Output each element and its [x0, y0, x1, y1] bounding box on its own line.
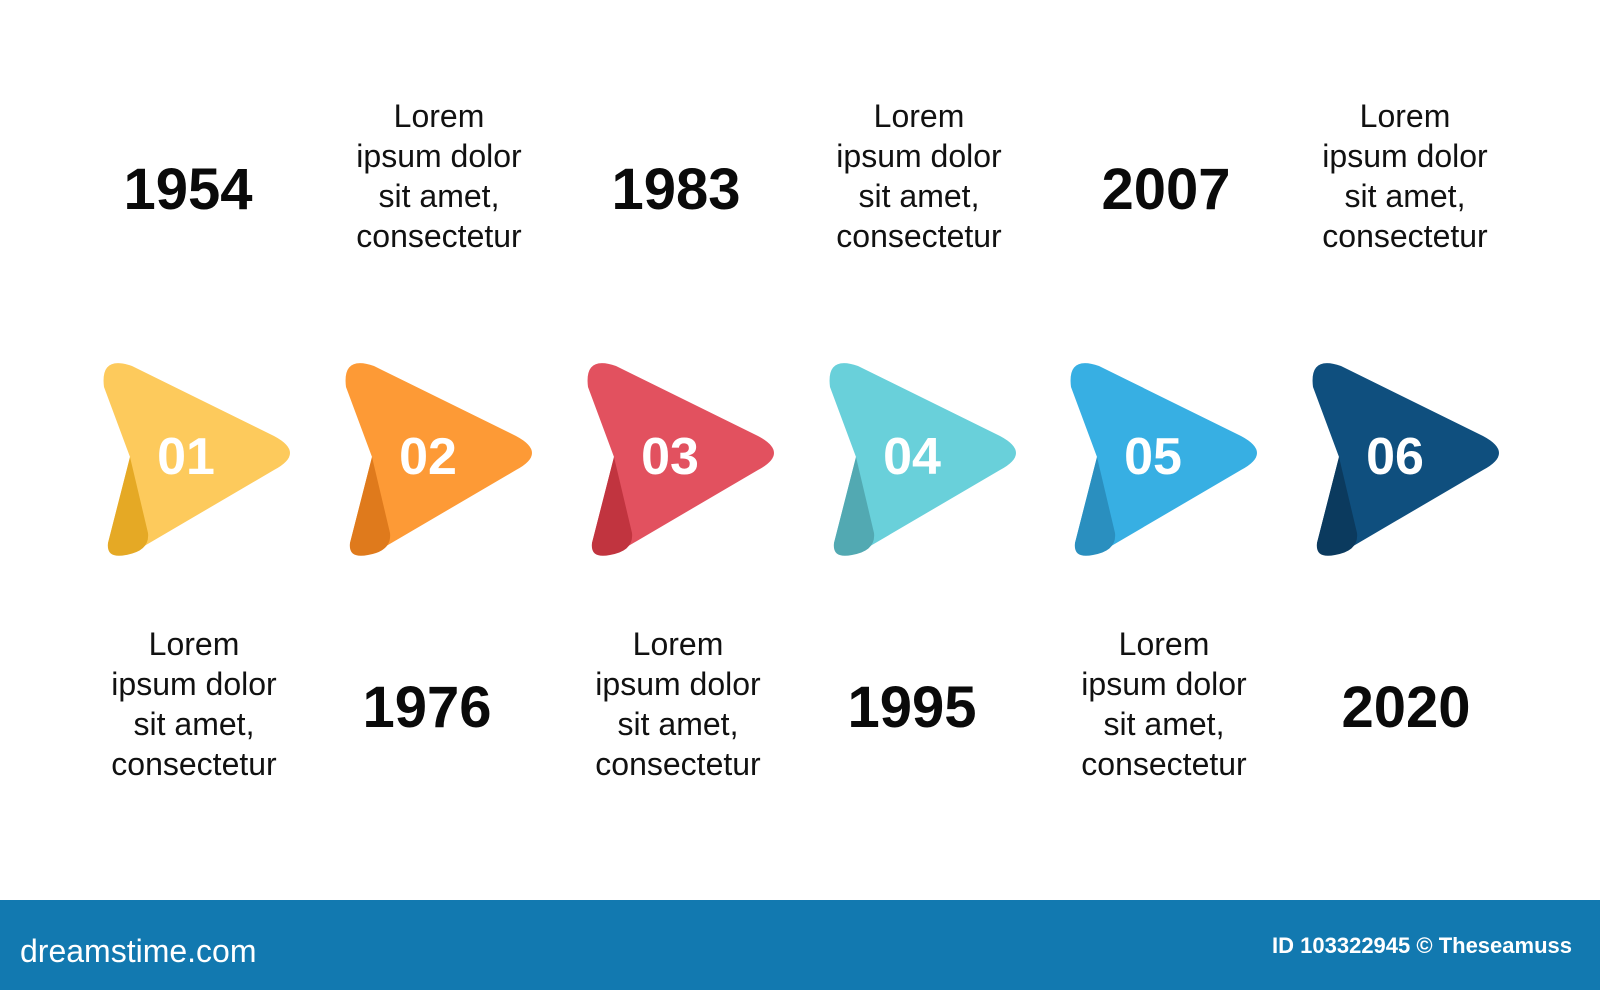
arrow 01 [104, 363, 290, 556]
top text block 1: sit amet, [379, 178, 499, 214]
bottom text block 1 [111, 626, 277, 782]
footer bar [0, 900, 1600, 990]
arrow 04 [830, 363, 1016, 556]
top text block 1: ipsum dolor [356, 138, 522, 174]
top text block 1: consectetur [356, 218, 522, 254]
bottom text block 1: ipsum dolor [111, 666, 277, 702]
arrow 01: 01 [157, 428, 215, 486]
bottom text block 2: ipsum dolor [595, 666, 761, 702]
arrow 02 [346, 363, 532, 556]
top text block 1 [356, 98, 522, 254]
arrow 06: 06 [1366, 428, 1424, 486]
bottom text block 3: Lorem [1119, 626, 1209, 662]
top text block 2: sit amet, [859, 178, 979, 214]
bottom text block 1: Lorem [149, 626, 239, 662]
top text block 3 [1322, 98, 1488, 254]
top text block 3: Lorem [1360, 98, 1450, 134]
footer id text: ID 103322945 © Theseamuss [1272, 933, 1572, 958]
arrow 04: 04 [883, 428, 941, 486]
arrow 03 [588, 363, 774, 556]
bottom text block 1: sit amet, [134, 706, 254, 742]
arrow 05: 05 [1124, 428, 1182, 486]
arrow 03: 03 [641, 428, 699, 486]
top text block 2: ipsum dolor [836, 138, 1002, 174]
arrow 02: 02 [399, 428, 457, 486]
top text block 3: sit amet, [1345, 178, 1465, 214]
top text block 3: ipsum dolor [1322, 138, 1488, 174]
top year: 2007: 2007 [1101, 157, 1231, 222]
bottom text block 1: consectetur [111, 746, 277, 782]
top text block 1: Lorem [394, 98, 484, 134]
top text block 2 [836, 98, 1002, 254]
bottom text block 3: sit amet, [1104, 706, 1224, 742]
arrow 06 [1313, 363, 1499, 556]
bottom text block 2: consectetur [595, 746, 761, 782]
bottom text block 2: Lorem [633, 626, 723, 662]
footer logo text: dreamstime.com [20, 933, 256, 969]
bottom text block 3 [1081, 626, 1247, 782]
top text block 2: Lorem [874, 98, 964, 134]
bottom text block 2 [595, 626, 761, 782]
top year: 1954: 1954 [123, 157, 253, 222]
top text block 3: consectetur [1322, 218, 1488, 254]
bottom year: 1995: 1995 [847, 675, 977, 740]
bottom text block 3: consectetur [1081, 746, 1247, 782]
bottom text block 3: ipsum dolor [1081, 666, 1247, 702]
top year: 1983: 1983 [611, 157, 741, 222]
top text block 2: consectetur [836, 218, 1002, 254]
arrow 05 [1071, 363, 1257, 556]
bottom year: 1976: 1976 [362, 675, 492, 740]
bottom year: 2020: 2020 [1341, 675, 1471, 740]
bottom text block 2: sit amet, [618, 706, 738, 742]
